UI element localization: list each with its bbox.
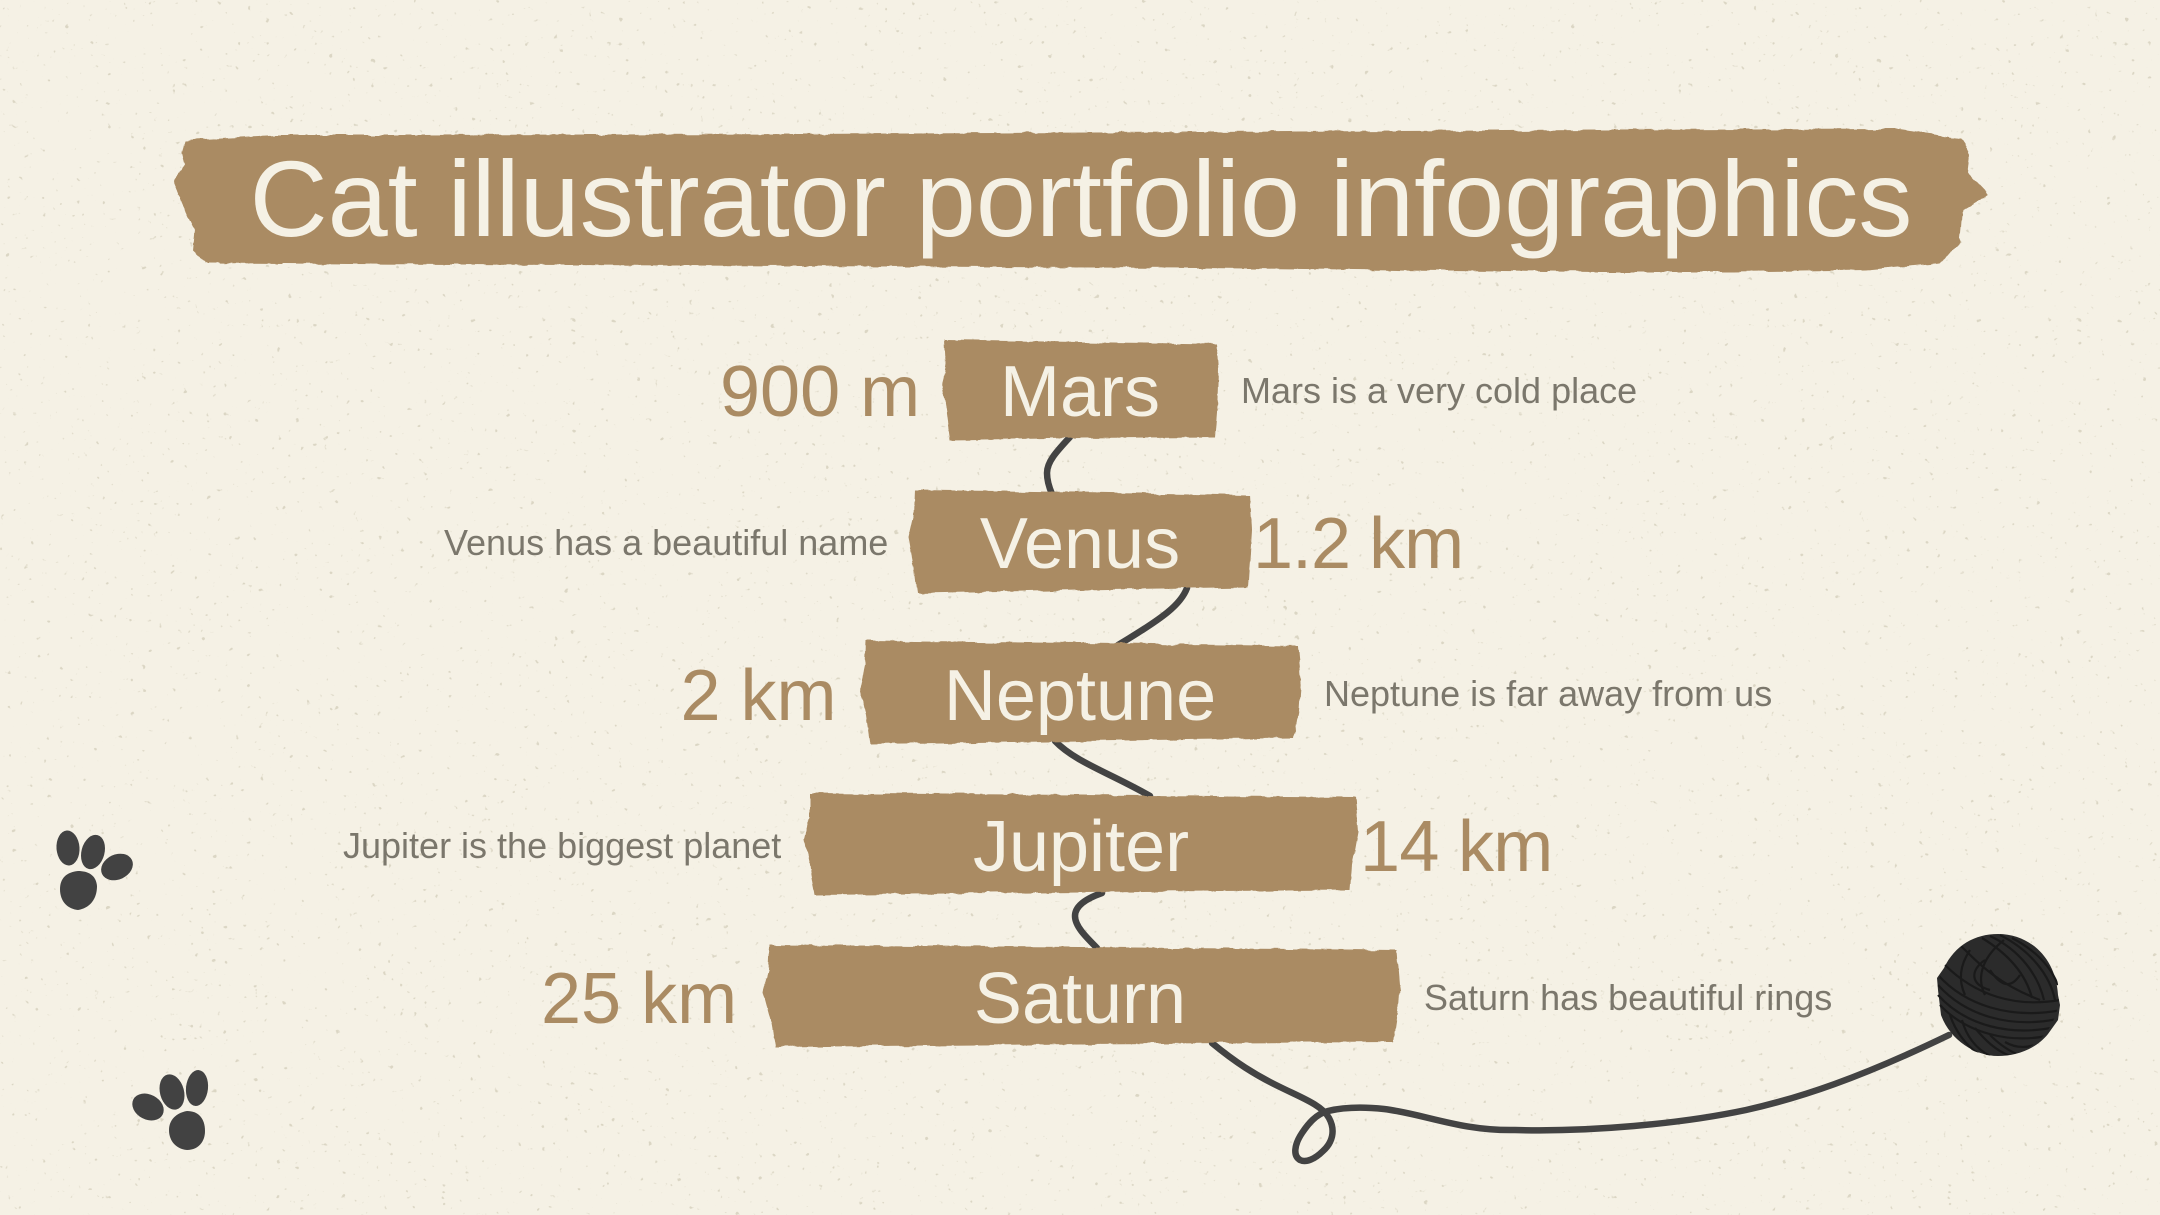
icon: paw print upper — [55, 830, 137, 910]
row: Saturn — [541, 945, 1832, 1047]
value: 25 km: 25 km — [541, 959, 737, 1039]
description: Mars: Mars is a very cold place — [1241, 370, 1637, 411]
label text: Venus: Venus — [980, 504, 1180, 584]
icon: paw print lower — [128, 1069, 210, 1150]
row: Neptune — [680, 641, 1772, 744]
label text: Mars: Mars — [1000, 352, 1160, 432]
row: Mars — [720, 340, 1637, 440]
row: Jupiter — [343, 793, 1553, 895]
description: Venus: Venus has a beautiful name — [444, 522, 888, 563]
yarn thread connecting the planets to the ball — [1047, 437, 1949, 1161]
description: Neptune: Neptune is far away from us — [1324, 673, 1772, 714]
label box: Neptune — [860, 641, 1301, 744]
title text: Cat illustrator portfolio infographics — [250, 138, 1912, 259]
label box: Jupiter — [805, 793, 1358, 895]
label box: Venus — [909, 490, 1252, 593]
row: Venus — [444, 490, 1463, 593]
description: Jupiter: Jupiter is the biggest planet — [343, 825, 781, 866]
label box: Saturn — [763, 945, 1400, 1047]
title banner — [173, 129, 1989, 272]
value: 2 km: 2 km — [680, 656, 837, 736]
value: 1.2 km: 1.2 km — [1253, 504, 1463, 584]
icon: ball of yarn — [1937, 934, 2062, 1056]
label text: Neptune: Neptune — [944, 656, 1216, 736]
label box: Mars — [942, 340, 1219, 440]
description: Saturn: Saturn has beautiful rings — [1424, 977, 1832, 1018]
title — [173, 129, 1989, 272]
value: 900 m: 900 m — [720, 352, 920, 432]
label text: Saturn: Saturn — [974, 959, 1186, 1039]
value: 14 km: 14 km — [1360, 807, 1553, 887]
label text: Jupiter: Jupiter — [973, 807, 1189, 887]
